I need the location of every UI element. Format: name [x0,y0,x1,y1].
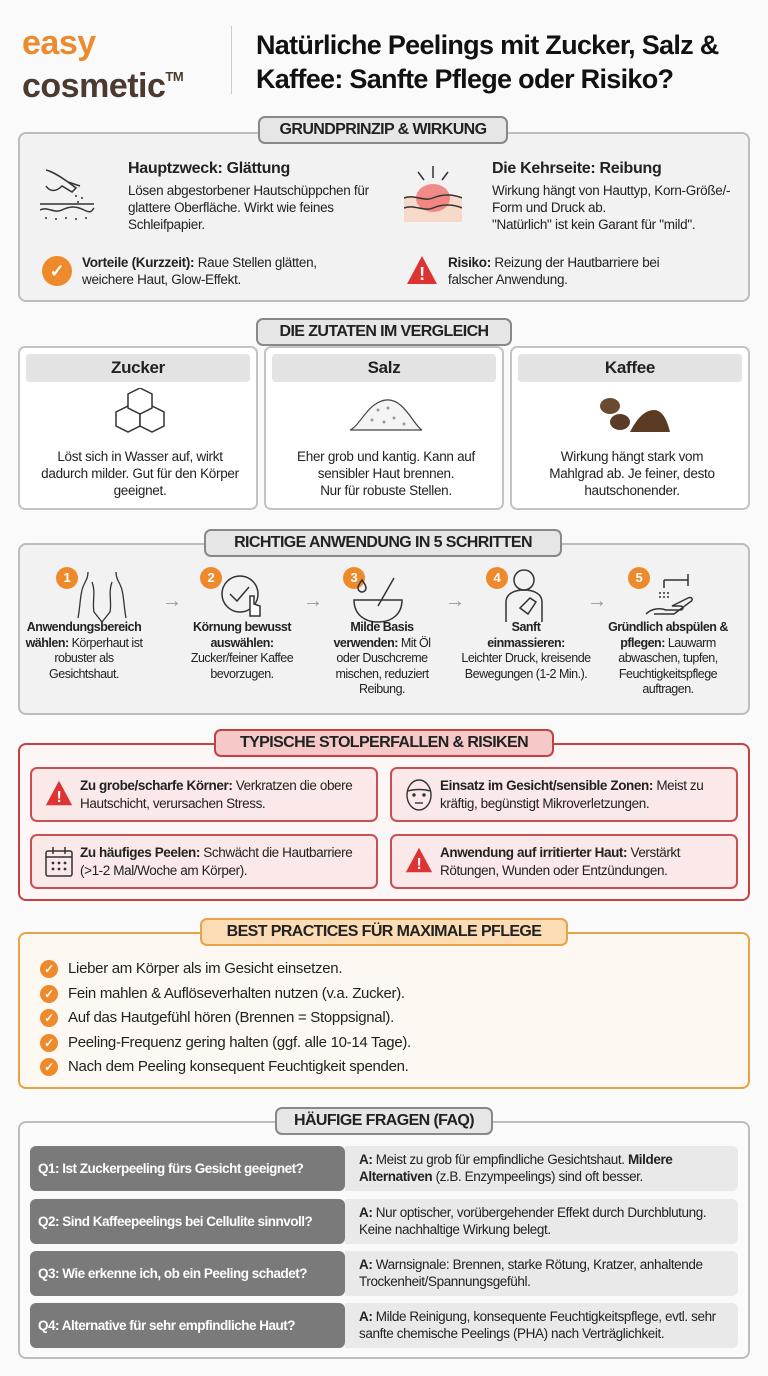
text: → [162,590,182,612]
list: Peeling-Frequenz gering halten (ggf. alle 10-14 Tage). [68,1034,411,1050]
text: 4 [494,570,500,585]
logo [22,24,183,105]
step 3 [333,567,431,696]
FAQ 3 [30,1251,738,1296]
text: einmassieren: [487,636,565,650]
icon: check [42,256,72,286]
risk 4 [390,834,738,889]
card: Salz: Eher grob und kantig. Kann auf sensibler Haut brennen. [297,449,475,481]
list: ✓ [44,1011,54,1025]
risk 4: Anwendung auf irritierter Haut: Verstärkt Rötungen, Wunden oder Entzündungen. [440,845,680,878]
text: Hauptzweck: Hauptzweck: Glättung [128,160,290,177]
title: Kaffee: Sanfte Pflege oder Risiko? [256,64,673,94]
text: Q2: Sind Kaffeepeelings bei Cellulite sinnvoll? [38,1214,312,1229]
heading: Risiken: TYPISCHE STOLPERFALLEN & RISIKEN [240,734,528,751]
text: Körnung bewusst auswählen: Zucker/feiner Kaffee bevorzugen. [191,620,293,680]
icon: salt pile [350,399,422,431]
risk 1: Zu grobe/scharfe Körner: Verkratzen die obere Hautschicht, verursachen Stress. [80,778,352,811]
icon: hand scrub [40,169,94,220]
list: ✓ [44,987,54,1001]
text: → [445,590,465,612]
step 4 [461,567,591,680]
panel: Best Practices [18,932,750,1089]
heading: Best Practices [200,918,568,946]
text: Kehrseite: Die Kehrseite: Reibung [492,160,661,177]
list: Nach dem Peeling konsequent Feuchtigkeit spenden. [68,1058,409,1075]
icon: warning [407,256,437,284]
risk 1: ! [57,789,61,806]
panel: Zutaten [18,346,750,510]
heading: Grundprinzip: GRUNDPRINZIP & WIRKUNG [280,121,486,138]
text: Kehrseite [492,160,730,232]
risk 4: ! [417,856,421,873]
risk 3 [30,834,378,889]
card: Kaffee: Kaffee [605,358,655,377]
card: Zucker [18,346,258,510]
text: 3 [351,570,357,585]
icon: skin friction [404,166,462,222]
text: Gründlich abspülen & pflegen: Lauwarm abwaschen, tupfen, Feuchtigkeitspflege auftragen. [608,620,728,696]
heading: Anwendung [204,529,562,557]
title: Natürliche Peelings mit Zucker, Salz & [256,30,719,60]
text: → [587,590,607,612]
card: Kaffee: Wirkung hängt stark vom Mahlgrad ab. Je feiner, desto hautschonender. [549,449,715,498]
text: Q4: Alternative für sehr empfindliche Haut? [38,1318,295,1333]
text: Hauptzweck: Lösen abgestorbener Hautschüppchen für glattere Oberfläche. Wirkt wie feines Schleifpapier. [128,183,369,232]
logo: cosmeticTM [22,67,183,105]
text: Kehrseite: "Natürlich" ist kein Garant für "mild". [492,217,695,232]
text: Risiko: Risiko: Reizung der Hautbarriere bei falscher Anwendung. [448,255,659,287]
text: Vorteile: Vorteile (Kurzzeit): Raue Stellen glätten, weichere Haut, Glow-Effekt. [82,255,317,287]
text: Milde Basis verwenden: Mit Öl oder Duschcreme mischen, reduziert Reibung. [333,620,431,696]
step 5 [608,567,728,696]
text: 5 [636,570,642,585]
logo: easy [22,24,96,62]
text: Hauptzweck [128,160,369,232]
panel: Risiken [18,743,750,901]
panel: Anwendung [18,543,750,715]
title [256,30,719,94]
text: Anwendungsbereich wählen: Körperhaut ist robuster als Gesichtshaut. [26,620,142,680]
step 1 [26,567,143,680]
text: 1 [64,570,70,585]
list [40,960,411,1076]
FAQ 2 [30,1199,738,1244]
risk 1 [30,767,378,822]
risk 3: Zu häufiges Peelen: Schwächt die Hautbarriere (>1-2 Mal/Woche am Körper). [80,845,352,878]
heading: Risiken [214,729,554,757]
heading: Grundprinzip [258,116,508,144]
list: ✓ [44,1036,54,1050]
list: Fein mahlen & Auflöseverhalten nutzen (v.a. Zucker). [68,984,405,1002]
text: Q3: Wie erkenne ich, ob ein Peeling schadet? [38,1266,307,1281]
text: Q1: Ist Zuckerpeeling fürs Gesicht geeignet? [38,1161,303,1176]
text: 2 [208,570,214,585]
text: Kehrseite: Wirkung hängt von Hauttyp, Korn-Größe/-Form und Druck ab. [492,183,730,215]
icon: coffee beans [600,398,670,432]
card: Salz: Salz [368,358,400,377]
list: ✓ [44,962,54,976]
list: Lieber am Körper als im Gesicht einsetzen. [68,960,342,977]
text: A: Meist zu grob für empfindliche Gesichtshaut. Mildere Alternativen (z.B. Enzympeelings) sind oft besser. [359,1152,672,1184]
heading: Zutaten: DIE ZUTATEN IM VERGLEICH [279,323,488,340]
heading: Best Practices: BEST PRACTICES FÜR MAXIMALE PFLEGE [227,923,541,940]
text: A: Warnsignale: Brennen, starke Rötung, Kratzer, anhaltende Trockenheit/Spannungsgefühl. [359,1257,703,1289]
FAQ 1 [30,1146,738,1191]
FAQ 4 [30,1303,738,1348]
risk 2 [390,767,738,822]
icon: sugar cubes [115,388,165,433]
heading: FAQ [275,1107,493,1135]
risk 2: Einsatz im Gesicht/sensible Zonen: Meist zu kräftig, begünstigt Mikroverletzungen. [440,778,703,811]
text: A: Nur optischer, vorübergehender Effekt durch Durchblutung. Keine nachhaltige Wirkung belegt. [359,1205,706,1237]
card: Salz [264,346,504,510]
icon: check: ✓ [50,261,64,281]
heading: FAQ: HÄUFIGE FRAGEN (FAQ) [294,1112,474,1129]
text: → [303,590,323,612]
list: Auf das Hautgefühl hören (Brennen = Stoppsignal). [68,1009,394,1026]
card: Zucker: Zucker [111,358,165,377]
list: ✓ [44,1060,54,1074]
icon: warning: ! [419,264,425,284]
step 2 [191,567,294,680]
text: A: Milde Reinigung, konsequente Feuchtigkeitspflege, evtl. sehr sanfte chemische Peelings (PHA) nach Verträglichkeit. [359,1309,716,1341]
panel: Grundprinzip [18,132,750,302]
heading: Zutaten [256,318,512,346]
card: Salz: Nur für robuste Stellen. [320,483,452,498]
panel: FAQ [18,1121,750,1359]
heading: Anwendung: RICHTIGE ANWENDUNG IN 5 SCHRITTEN [234,534,532,551]
card: Kaffee [510,346,750,510]
text: Leichter Druck, kreisende Bewegungen (1-2 Min.). [461,651,591,680]
text: Sanft [512,620,540,634]
card: Zucker: Löst sich in Wasser auf, wirkt dadurch milder. Gut für den Körper geeignet. [41,449,239,498]
